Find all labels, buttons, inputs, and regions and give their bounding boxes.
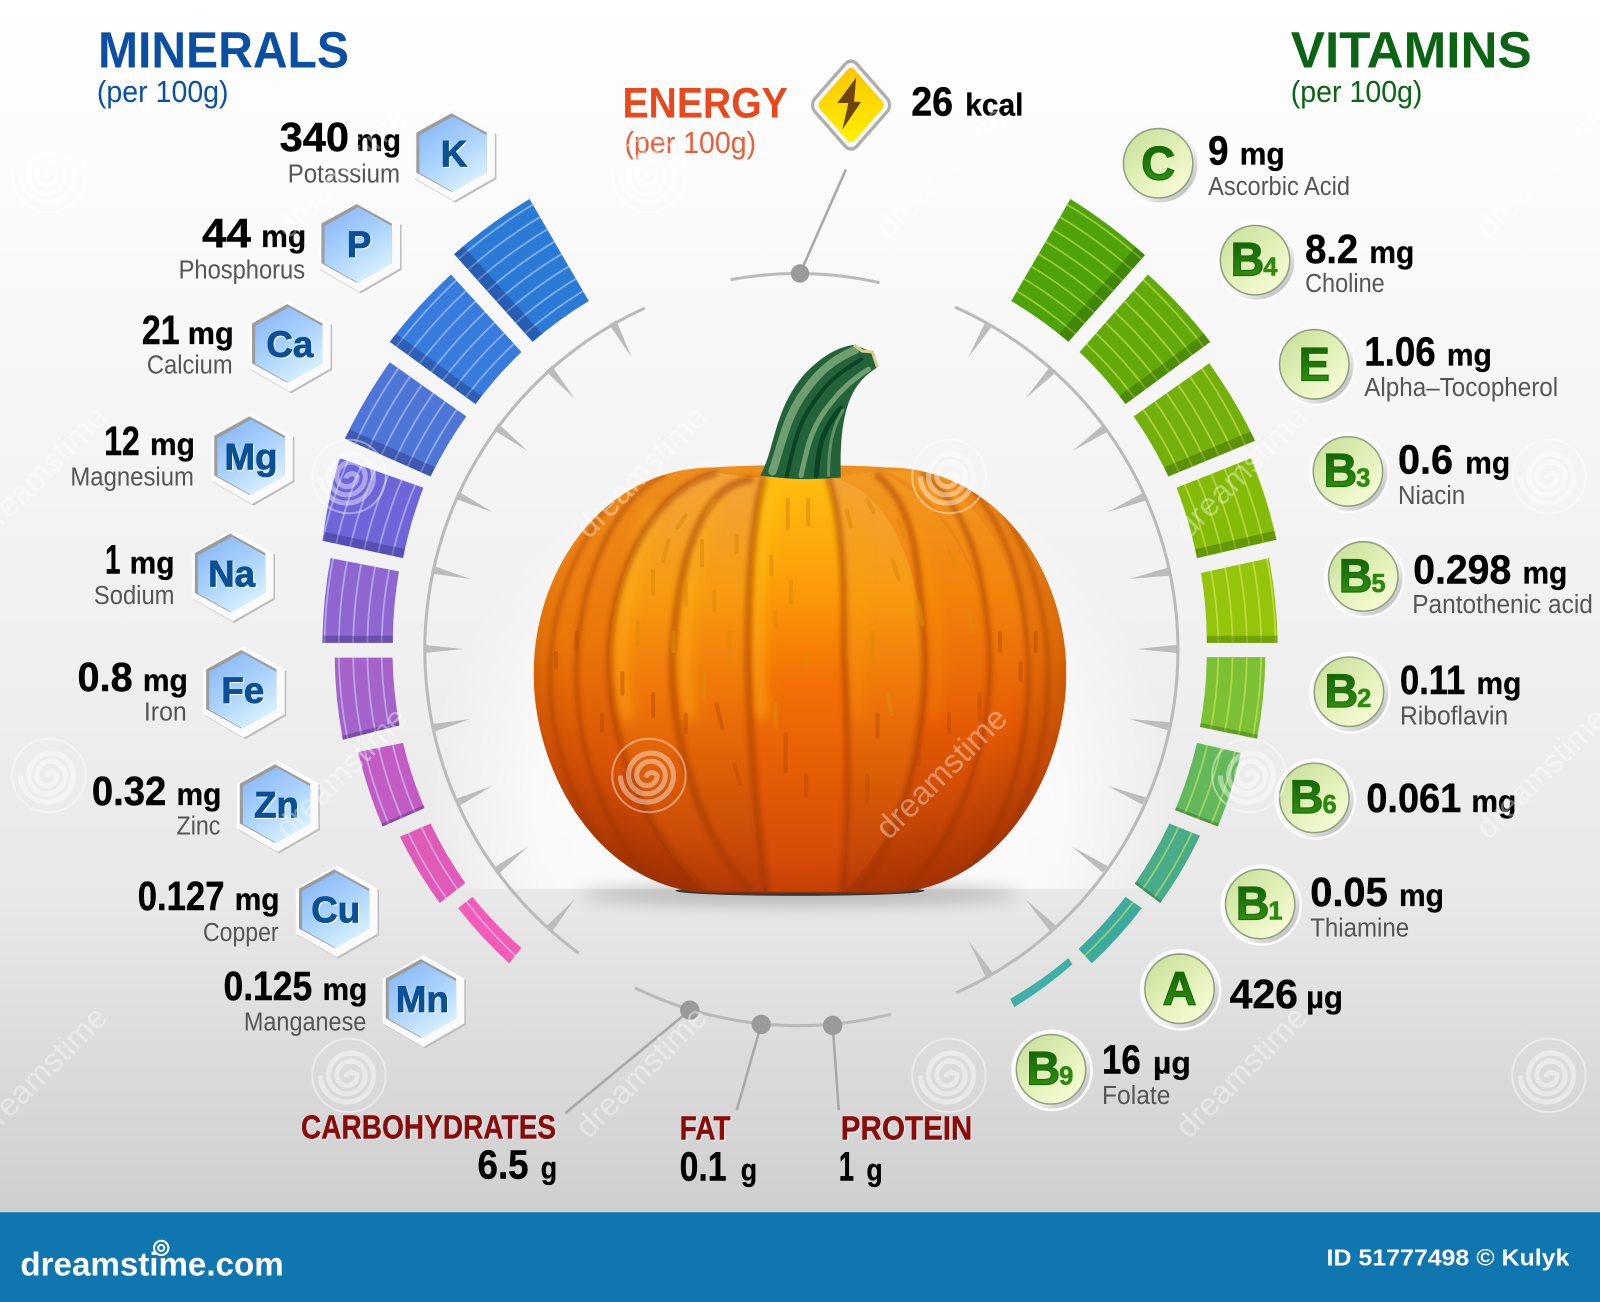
macro: protein: PROTEIN bbox=[841, 1111, 972, 1148]
energy leader line and dot bbox=[791, 169, 846, 283]
heading: minerals bbox=[97, 21, 349, 109]
pumpkin stem bbox=[760, 345, 878, 479]
vitamin: B5 bbox=[1323, 537, 1593, 619]
mineral: calcium: Calcium bbox=[147, 351, 233, 379]
macro: carbohydrates: 6.5 bbox=[478, 1142, 529, 1188]
watermark spirals and text: dreamstime bbox=[1167, 998, 1314, 1145]
vitamin: A bbox=[1140, 949, 1343, 1031]
vitamin: B5: Pantothenic acid bbox=[1412, 591, 1593, 619]
vitamin: E: Alpha–Tocopherol bbox=[1364, 374, 1558, 402]
mineral: sodium: mg bbox=[130, 544, 174, 580]
mineral: copper: mg bbox=[235, 881, 280, 917]
vitamin: B1 bbox=[1220, 864, 1444, 946]
pumpkin ground shadow bbox=[581, 885, 1019, 905]
mineral: magnesium bbox=[70, 412, 294, 506]
watermark spirals and text: dreamstime bbox=[1167, 398, 1314, 545]
vitamin: C: mg bbox=[1240, 135, 1285, 171]
mineral: manganese: 0.125 bbox=[223, 963, 312, 1009]
heading: minerals: (per 100g) bbox=[97, 75, 229, 109]
mineral: zinc: Zinc bbox=[177, 813, 221, 841]
macro: fat: FAT bbox=[680, 1111, 731, 1148]
mineral: magnesium: 12 bbox=[104, 418, 140, 464]
energy value: kcal bbox=[965, 86, 1023, 122]
vitamin: B3: B bbox=[1323, 445, 1357, 497]
mineral: copper bbox=[138, 865, 379, 959]
heading: vitamins: VITAMINS bbox=[1291, 21, 1532, 78]
vitamin: B2: mg bbox=[1477, 665, 1521, 701]
vitamin: B3 bbox=[1308, 432, 1510, 513]
white glow behind pumpkin bbox=[408, 408, 1194, 889]
vitamin: C: Ascorbic Acid bbox=[1208, 173, 1350, 201]
vitamin: B2: B bbox=[1324, 665, 1358, 717]
mineral: phosphorus: 44 bbox=[202, 210, 251, 256]
vitamin: E: E bbox=[1299, 339, 1330, 391]
mineral: sodium bbox=[94, 530, 275, 623]
mineral: potassium bbox=[280, 109, 496, 203]
vitamin: B1: 1 bbox=[1268, 897, 1283, 925]
watermark spirals and text: dreamstime bbox=[867, 98, 1014, 245]
vitamin: B9: 16 bbox=[1102, 1036, 1141, 1082]
mineral: potassium: mg bbox=[356, 122, 401, 158]
watermark spirals and text: dreamstime bbox=[867, 699, 1014, 846]
mineral: magnesium: mg bbox=[150, 426, 195, 462]
vitamin: B9: µg bbox=[1153, 1044, 1191, 1080]
vitamin: B9: 9 bbox=[1059, 1063, 1073, 1091]
chart: mineral radial bars bbox=[322, 199, 589, 964]
gauge: ring arcs and ticks bbox=[423, 274, 1178, 1026]
macro: carbohydrates: CARBOHYDRATES bbox=[301, 1110, 556, 1147]
mineral: sodium: Na bbox=[208, 554, 256, 595]
vitamin: B4: 8.2 bbox=[1305, 226, 1358, 272]
mineral: zinc: 0.32 bbox=[92, 768, 166, 814]
vitamin: B1: 0.05 bbox=[1310, 869, 1388, 915]
mineral: calcium: Ca bbox=[266, 324, 314, 365]
mineral: sodium: 1 bbox=[105, 536, 120, 582]
mineral: phosphorus: mg bbox=[261, 218, 306, 254]
mineral: iron bbox=[78, 646, 286, 739]
watermark spirals and text: dreamstime bbox=[567, 398, 714, 545]
vitamin: B9 bbox=[1011, 1030, 1191, 1111]
heading: vitamins: (per 100g) bbox=[1291, 75, 1422, 109]
footer logo text: dreamstime.com bbox=[20, 1246, 284, 1283]
mineral: iron: Fe bbox=[221, 670, 264, 711]
mineral: calcium bbox=[142, 300, 332, 393]
vitamin: B1: Thiamine bbox=[1310, 915, 1409, 943]
mineral: magnesium: Mg bbox=[225, 436, 278, 477]
mineral: potassium: K bbox=[441, 133, 468, 174]
mineral: iron: Iron bbox=[144, 698, 187, 726]
mineral: iron: mg bbox=[143, 662, 188, 698]
vitamin: B3: Niacin bbox=[1398, 482, 1465, 510]
mineral: phosphorus bbox=[179, 200, 402, 293]
vitamin: B2: 0.11 bbox=[1400, 657, 1465, 703]
vitamin: C: C bbox=[1141, 138, 1175, 190]
vitamin: B5: 5 bbox=[1371, 570, 1386, 598]
pumpkin warts bbox=[556, 500, 1036, 824]
mineral: zinc: Zn bbox=[254, 784, 299, 825]
heading: minerals: MINERALS bbox=[98, 21, 349, 78]
energy value: 26 bbox=[911, 78, 953, 124]
vitamin: B5: mg bbox=[1522, 555, 1567, 591]
vitamin: B3: 3 bbox=[1356, 465, 1370, 493]
mineral: zinc: mg bbox=[177, 776, 221, 812]
macro: carbohydrates bbox=[301, 1110, 557, 1188]
vitamin: B3: mg bbox=[1465, 444, 1510, 480]
energy value bbox=[911, 78, 1023, 124]
mineral: copper: Copper bbox=[203, 919, 279, 947]
macro: protein: 1 bbox=[839, 1144, 854, 1190]
macro: protein: g bbox=[866, 1152, 883, 1188]
vitamin: A: µg bbox=[1306, 979, 1343, 1015]
vitamin: B4: mg bbox=[1369, 234, 1414, 270]
macro: carbohydrates: g bbox=[541, 1150, 557, 1186]
macro: fat bbox=[680, 1111, 757, 1190]
heading: energy: ENERGY bbox=[622, 79, 788, 127]
vitamin: B2: Riboflavin bbox=[1400, 702, 1508, 730]
vitamin: E: mg bbox=[1447, 336, 1492, 372]
vitamin: B5: 0.298 bbox=[1413, 547, 1511, 593]
icon: energy lightning diamond bbox=[809, 57, 893, 153]
vitamin: B9: Folate bbox=[1102, 1082, 1170, 1110]
macro: protein bbox=[839, 1111, 972, 1190]
vitamin: A: 426 bbox=[1230, 971, 1298, 1017]
watermark spirals and text: dreamstime bbox=[267, 699, 414, 846]
mineral: manganese: Mn bbox=[396, 979, 449, 1020]
vitamin: B4: 4 bbox=[1263, 254, 1278, 282]
vitamin: B6: mg bbox=[1471, 783, 1516, 819]
footer logo spiral bbox=[154, 1241, 168, 1255]
vitamin: E bbox=[1274, 324, 1558, 406]
vitamin: B4: B bbox=[1231, 234, 1264, 286]
pumpkin body lobes bbox=[520, 454, 1082, 903]
mineral: calcium: 21 bbox=[142, 307, 180, 353]
vitamin: B9: B bbox=[1027, 1043, 1060, 1095]
vitamin: E: 1.06 bbox=[1364, 328, 1436, 374]
mineral: calcium: mg bbox=[188, 315, 234, 351]
macro: fat: g bbox=[741, 1152, 757, 1188]
macronutrient leader lines and dots bbox=[565, 1000, 842, 1113]
mineral: copper: 0.127 bbox=[138, 873, 224, 919]
vitamin: B3: 0.6 bbox=[1398, 436, 1453, 482]
heading: vitamins bbox=[1291, 21, 1532, 109]
mineral: magnesium: Magnesium bbox=[70, 464, 194, 492]
mineral: copper: Cu bbox=[311, 889, 360, 930]
heading: energy: (per 100g) bbox=[624, 126, 756, 160]
pumpkin illustration bbox=[520, 345, 1082, 903]
mineral: zinc bbox=[92, 760, 320, 854]
mineral: manganese bbox=[223, 955, 466, 1048]
watermark spirals and text: dreamstime bbox=[567, 998, 714, 1145]
vitamin: B6: 6 bbox=[1322, 791, 1337, 819]
vitamin: B6: 0.061 bbox=[1366, 775, 1461, 821]
macro: fat: 0.1 bbox=[680, 1144, 727, 1190]
vitamin: C bbox=[1118, 123, 1350, 205]
mineral: phosphorus: Phosphorus bbox=[179, 257, 305, 285]
vitamin: B1: mg bbox=[1399, 877, 1444, 913]
mineral: phosphorus: P bbox=[347, 224, 371, 265]
vitamin: B6 bbox=[1274, 758, 1516, 840]
vitamin: A: A bbox=[1163, 963, 1197, 1015]
footer bar bbox=[0, 1212, 1600, 1302]
vitamin: C: 9 bbox=[1208, 127, 1229, 173]
vitamin: B4 bbox=[1215, 220, 1414, 302]
mineral: iron: 0.8 bbox=[78, 654, 133, 700]
vitamin: B1: B bbox=[1236, 877, 1269, 929]
mineral: potassium: 340 bbox=[280, 114, 349, 160]
vitamin: B5: B bbox=[1339, 550, 1372, 602]
mineral: potassium: Potassium bbox=[288, 161, 400, 189]
heading: energy bbox=[622, 79, 788, 160]
vitamin: B2: 2 bbox=[1357, 685, 1371, 713]
mineral: manganese: Manganese bbox=[244, 1009, 366, 1037]
vitamin: B2 bbox=[1309, 652, 1521, 734]
vitamin: B4: Choline bbox=[1305, 270, 1385, 298]
chart: vitamin radial bars bbox=[1010, 199, 1278, 1008]
footer image id: ID 51777498 © Kulyk bbox=[1327, 1244, 1570, 1270]
mineral: manganese: mg bbox=[322, 971, 367, 1007]
mineral: sodium: Sodium bbox=[94, 582, 174, 610]
vitamin: B6: B bbox=[1290, 771, 1323, 823]
watermark spirals and text: dreamstime bbox=[267, 98, 414, 245]
